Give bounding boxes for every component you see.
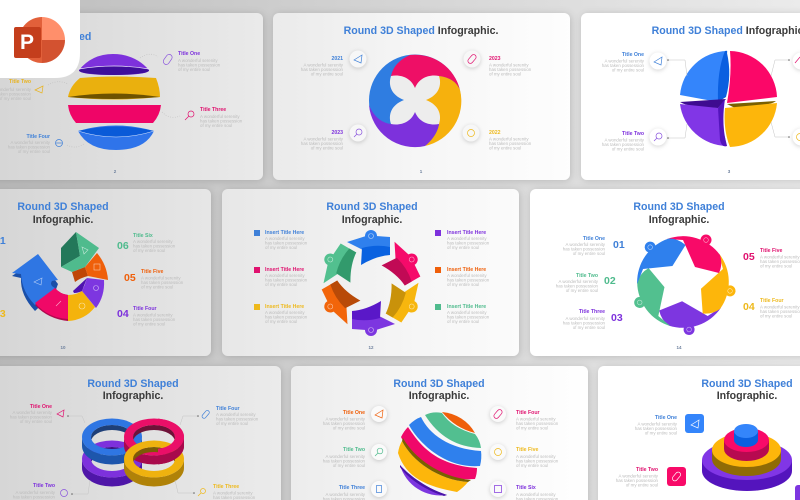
text: Title Six: 06 bbox=[117, 240, 129, 252]
text: 01 Title One: A wonderful serenity bbox=[565, 242, 606, 247]
icon: plane bbox=[650, 52, 666, 70]
text: Title Two: has taken possession bbox=[602, 142, 645, 147]
page number: 12 bbox=[368, 345, 374, 350]
text: 02 Title Two: A wonderful serenity bbox=[558, 279, 599, 284]
list item 6: of my entire soul bbox=[447, 319, 479, 324]
heading bbox=[701, 378, 793, 402]
text: Title Four: of my entire soul bbox=[133, 322, 165, 326]
text: 04 Title Four bbox=[743, 298, 800, 318]
chart: swirl circle bbox=[369, 54, 461, 147]
text: Title One: has taken possession bbox=[10, 414, 53, 420]
text: 02 Title Two: has taken possession bbox=[556, 284, 599, 288]
text: Title One: has taken possession bbox=[635, 426, 678, 431]
text: Title Four bbox=[8, 134, 51, 154]
list item 2: of my entire soul bbox=[265, 282, 297, 287]
icon: plane bbox=[57, 410, 64, 417]
text: Title Two: Title Two bbox=[622, 131, 644, 137]
icon: pink square bbox=[667, 467, 686, 486]
text: 05 Title Five: of my entire soul bbox=[760, 264, 792, 268]
panel: stacked discs slide bbox=[598, 366, 800, 500]
list item 2: Insert Title Here bbox=[265, 267, 304, 273]
text: 05 Title Five: 05 bbox=[743, 251, 755, 263]
icon: clip bbox=[792, 52, 800, 70]
list item 6: has taken possession bbox=[447, 314, 490, 320]
text: Title Four: has taken possession bbox=[8, 144, 51, 150]
icon: globe bbox=[60, 490, 68, 496]
chart: six segment ring bbox=[313, 230, 429, 336]
text: Title One: A wonderful serenity bbox=[604, 58, 645, 64]
text: Title Two bbox=[0, 79, 32, 101]
text: Title One: Title One bbox=[622, 52, 644, 58]
text: 2022: of my entire soul bbox=[489, 146, 521, 150]
text: 2022: A wonderful serenity bbox=[489, 136, 529, 142]
list item 1 bbox=[254, 230, 308, 250]
heading bbox=[17, 201, 109, 226]
text: Title One bbox=[635, 415, 678, 436]
heading: Infographic. bbox=[649, 214, 709, 226]
text: Title Five bbox=[516, 447, 559, 468]
text: Title Five: Title Five bbox=[516, 447, 539, 453]
list item 4: Insert Title Here bbox=[447, 230, 486, 236]
page number: 1 bbox=[420, 169, 423, 174]
icon: document bbox=[371, 481, 387, 497]
text: 2023 purple: A wonderful serenity bbox=[303, 136, 344, 142]
panel: star circle slide bbox=[530, 189, 800, 356]
text: Title Three: Title Three bbox=[200, 107, 226, 113]
connectors bbox=[48, 54, 180, 147]
list item 3 bbox=[254, 304, 308, 324]
text: 2021 bbox=[301, 56, 344, 76]
text: 2022 bbox=[489, 130, 532, 150]
text: Title One: A wonderful serenity bbox=[325, 416, 366, 422]
icon: plane bbox=[35, 86, 43, 93]
text: 01 Title One: 01 bbox=[613, 239, 625, 251]
icon: clip bbox=[162, 53, 173, 66]
text: Title Two: A wonderful serenity bbox=[618, 474, 659, 478]
text: Title Three bbox=[323, 485, 366, 500]
connectors bbox=[67, 415, 199, 495]
text: 03 Title Three: Title Three bbox=[579, 309, 605, 315]
panel: quartered sphere slide bbox=[581, 13, 800, 180]
list item 6 bbox=[435, 304, 490, 324]
text: Title Five: has taken possession bbox=[516, 458, 559, 464]
text: 2023 purple bbox=[301, 130, 344, 150]
heading bbox=[87, 378, 179, 402]
list item 4: A wonderful serenity bbox=[447, 236, 487, 241]
icon: coin bbox=[792, 128, 800, 146]
heading: Infographic. bbox=[717, 390, 777, 402]
heading: Round 3D Shaped Infographic. bbox=[344, 25, 498, 37]
list item 1: of my entire soul bbox=[265, 245, 297, 250]
heading: Infographic. bbox=[342, 214, 402, 226]
icon: clip bbox=[464, 50, 480, 68]
icon: coin bbox=[490, 444, 506, 460]
text: 01 Title One: Title One bbox=[583, 236, 605, 242]
text: 05 Title Five: Title Five bbox=[760, 248, 783, 254]
chart: spiral arrow bbox=[12, 232, 108, 321]
heading: Infographic. bbox=[33, 214, 93, 226]
icon: globe bbox=[56, 140, 62, 146]
list item 6: Insert Title Here bbox=[447, 304, 486, 310]
text: Title Four bbox=[117, 306, 176, 326]
text: 03 Title Three: of my entire soul bbox=[573, 325, 605, 330]
text: Title Four: has taken possession bbox=[216, 416, 259, 422]
icon: plane bbox=[371, 406, 387, 422]
text: Title Two: of my entire soul bbox=[333, 463, 365, 468]
list item 1: has taken possession bbox=[265, 240, 308, 246]
icon: calendar bbox=[490, 481, 506, 497]
heading: Round 3D Shaped bbox=[87, 378, 179, 390]
text: Title Four bbox=[516, 410, 559, 430]
text: 02 Title Two: 02 bbox=[604, 275, 616, 287]
text: Title Four: Title Four bbox=[26, 134, 50, 140]
text: Title Three bbox=[213, 484, 256, 500]
panel: spiral arrow slide bbox=[0, 189, 211, 356]
text: Title Five: Title Five bbox=[141, 269, 164, 275]
text: 03 Title Three: A wonderful serenity bbox=[565, 316, 606, 321]
text: Title Four: of my entire soul bbox=[216, 421, 248, 426]
list item 2 bbox=[254, 267, 308, 287]
text: Title One: of my entire soul bbox=[612, 68, 644, 72]
text: Title Three: Title Three bbox=[339, 485, 365, 491]
panel: linked rings slide bbox=[0, 366, 281, 500]
text: Title Five: has taken possession bbox=[141, 280, 184, 285]
text: Title One: of my entire soul bbox=[333, 426, 365, 430]
panel: butterfly circle slide bbox=[273, 13, 570, 180]
text: Title Six: has taken possession bbox=[133, 244, 176, 248]
text: Title Two: Title Two bbox=[9, 79, 31, 85]
text: 04 Title Four: of my entire soul bbox=[760, 314, 792, 318]
list item 5: of my entire soul bbox=[447, 282, 479, 287]
text: Title One: has taken possession bbox=[178, 62, 221, 68]
list item 2: A wonderful serenity bbox=[265, 273, 305, 278]
list item 4: of my entire soul bbox=[447, 245, 479, 250]
heading: Infographic. bbox=[409, 390, 469, 402]
icon: clip bbox=[490, 406, 506, 422]
icon: plane bbox=[350, 50, 366, 68]
list item 3: has taken possession bbox=[265, 314, 308, 320]
icon: key bbox=[650, 128, 666, 146]
chart: star ring bbox=[624, 231, 740, 343]
text: 2021: 2021 bbox=[331, 56, 343, 62]
heading: Round 3D Shaped bbox=[633, 201, 725, 213]
text: Title Three: Title Three bbox=[213, 484, 239, 490]
text: 02 Title Two bbox=[556, 273, 616, 293]
text: Title Two: has taken possession bbox=[323, 458, 366, 464]
text: Title Two: of my entire soul bbox=[612, 146, 644, 152]
icon: key bbox=[198, 488, 206, 496]
list item 2: has taken possession bbox=[265, 278, 308, 282]
text: 03 Title Three: 03 bbox=[611, 312, 623, 324]
text: Title Six: Title Six bbox=[516, 485, 536, 491]
heading: Round 3D Shaped bbox=[17, 201, 109, 213]
text: 01 Title One: has taken possession bbox=[563, 246, 606, 252]
text: Title Four: A wonderful serenity bbox=[10, 140, 51, 145]
text: Title Two bbox=[13, 483, 56, 500]
text: 2023 pink: of my entire soul bbox=[489, 72, 521, 76]
text: Title Six: A wonderful serenity bbox=[516, 492, 556, 497]
text: Title One: of my entire soul bbox=[178, 67, 210, 72]
text: Title Four: has taken possession bbox=[516, 421, 559, 426]
text: Title Four bbox=[216, 406, 259, 426]
page number: 14 bbox=[676, 345, 682, 350]
text: 2023 purple: has taken possession bbox=[301, 141, 344, 146]
chart: stacked discs bbox=[702, 424, 792, 491]
list item 1: A wonderful serenity bbox=[265, 236, 305, 241]
text: 2023 pink bbox=[489, 56, 532, 76]
text: Title Four: A wonderful serenity bbox=[516, 416, 556, 422]
text: Title Three: has taken possession bbox=[213, 495, 256, 500]
text: 2022: 2022 bbox=[489, 130, 501, 136]
text: 2021: of my entire soul bbox=[311, 72, 343, 76]
text: Title One: A wonderful serenity bbox=[637, 422, 678, 426]
panel: logo badge bbox=[0, 0, 80, 78]
text: Title Four: Title Four bbox=[516, 410, 540, 416]
page number: 10 bbox=[60, 345, 66, 350]
text: 2023 pink: has taken possession bbox=[489, 67, 532, 72]
text: Title Five bbox=[124, 269, 184, 290]
heading: Round 3D Shaped bbox=[701, 378, 793, 390]
text: Title Five: 05 bbox=[124, 272, 136, 284]
text: Title One bbox=[602, 52, 645, 72]
text: Title One bbox=[178, 51, 221, 72]
text: Title Four: A wonderful serenity bbox=[133, 312, 173, 318]
heading: Round 3D Shaped bbox=[393, 378, 485, 390]
list item 5: has taken possession bbox=[447, 278, 490, 282]
chart: striped ball bbox=[398, 412, 481, 496]
heading bbox=[326, 201, 418, 226]
list item 3: of my entire soul bbox=[265, 319, 297, 324]
page number: 3 bbox=[728, 169, 731, 174]
text: Title Five: A wonderful serenity bbox=[516, 454, 556, 459]
text: Title Two: Title Two bbox=[343, 447, 365, 453]
panel: striped ball slide bbox=[291, 366, 588, 500]
heading bbox=[633, 201, 725, 226]
page number: 2 bbox=[114, 169, 117, 174]
text: 2021: A wonderful serenity bbox=[303, 62, 344, 68]
text: Title Three: A wonderful serenity bbox=[213, 490, 253, 496]
chart: sliced sphere bbox=[68, 54, 161, 150]
text: Title Two bbox=[616, 467, 659, 488]
text: 03 Title Three: has taken possession bbox=[563, 320, 606, 326]
text: Title Four: of my entire soul bbox=[18, 149, 50, 154]
icon: purple square bbox=[795, 485, 800, 500]
text: Title Three: A wonderful serenity bbox=[325, 492, 366, 497]
text: 05 Title Five bbox=[743, 248, 800, 268]
text: Title Four: A wonderful serenity bbox=[216, 412, 256, 417]
text: Title One: has taken possession bbox=[602, 63, 645, 68]
text: Title Two bbox=[323, 447, 366, 468]
list item 3: A wonderful serenity bbox=[265, 310, 305, 315]
icon: key bbox=[371, 444, 387, 460]
text: 04 Title Four: 04 bbox=[743, 301, 755, 313]
text: 02 Title Two: of my entire soul bbox=[566, 288, 598, 293]
list item 6: A wonderful serenity bbox=[447, 310, 487, 315]
text: Title Six bbox=[516, 485, 559, 500]
text: Title Three bbox=[200, 107, 243, 128]
text: Title Two bbox=[602, 131, 645, 152]
text: 2023 pink: 2023 bbox=[489, 56, 501, 62]
heading: Round 3D Shaped bbox=[326, 201, 418, 213]
text: Title One: A wonderful serenity bbox=[12, 410, 53, 415]
chart: quartered sphere bbox=[680, 51, 777, 147]
text: Title Two: Title Two bbox=[33, 483, 55, 489]
text: Title One: of my entire soul bbox=[20, 419, 52, 424]
list item 4: has taken possession bbox=[447, 240, 490, 246]
text: Title One: has taken possession bbox=[323, 421, 366, 426]
chart: linked rings bbox=[82, 418, 184, 486]
text: Title Four: Title Four bbox=[216, 406, 240, 412]
heading: Infographic. bbox=[103, 390, 163, 402]
text: Title One: Title One bbox=[343, 410, 365, 416]
text: Title One bbox=[323, 410, 366, 430]
text: 01 Title One bbox=[563, 236, 625, 256]
text: 2023 purple: of my entire soul bbox=[311, 146, 343, 150]
icon: PowerPoint logo: P bbox=[20, 31, 34, 54]
list item 4 bbox=[435, 230, 490, 250]
text: Title Four: Title Four bbox=[133, 306, 157, 312]
text: 04 Title Four: A wonderful serenity bbox=[760, 304, 800, 310]
icon: coin bbox=[462, 124, 480, 142]
list item 5: A wonderful serenity bbox=[447, 273, 487, 278]
icon: clip bbox=[201, 410, 210, 419]
text: Title One bbox=[10, 404, 53, 424]
text: 2021: has taken possession bbox=[301, 67, 344, 72]
text: Title Five: of my entire soul bbox=[516, 463, 548, 468]
text: 02 Title Two: Title Two bbox=[576, 273, 598, 279]
text: Title Four: 04 bbox=[117, 308, 129, 320]
text: Title Five: of my entire soul bbox=[141, 284, 173, 290]
text: Title Five: A wonderful serenity bbox=[141, 276, 181, 280]
list item 5 bbox=[435, 267, 490, 287]
text: Title Six bbox=[117, 233, 176, 253]
panel: hexagon ring slide bbox=[222, 189, 519, 356]
text: 2023 pink: A wonderful serenity bbox=[489, 62, 529, 68]
text: Title One: A wonderful serenity bbox=[178, 58, 218, 63]
text: Title One: Title One bbox=[655, 415, 677, 421]
text: Title Three: of my entire soul bbox=[200, 123, 232, 128]
text: Title Four: has taken possession bbox=[133, 317, 176, 322]
text: Title Two: A wonderful serenity bbox=[325, 454, 366, 459]
text: Title Two: Title Two bbox=[636, 467, 658, 473]
list item 1: Insert Title Here bbox=[265, 230, 304, 236]
text: Title Six: Title Six bbox=[133, 233, 153, 239]
icon: blue square bbox=[685, 414, 704, 433]
text: Title One: Title One bbox=[178, 51, 200, 57]
icon: key bbox=[185, 111, 194, 120]
text: 2022: has taken possession bbox=[489, 141, 532, 146]
text: Title Two: of my entire soul bbox=[626, 482, 658, 488]
panel: sliced sphere slide bbox=[0, 13, 263, 180]
text: 04 Title Four: Title Four bbox=[760, 298, 784, 304]
text: Title Three: has taken possession bbox=[200, 118, 243, 124]
connectors bbox=[667, 59, 790, 139]
icon: key bbox=[350, 124, 366, 142]
text: 2023 purple: 2023 bbox=[331, 130, 343, 136]
text: Title Six: A wonderful serenity bbox=[133, 239, 173, 244]
heading bbox=[393, 378, 485, 402]
list item 3: Insert Title Here bbox=[265, 304, 304, 310]
text: 05 Title Five: A wonderful serenity bbox=[760, 254, 800, 260]
text: Title Two: A wonderful serenity bbox=[15, 490, 56, 495]
text: 01 Title One: of my entire soul bbox=[573, 251, 605, 256]
text: Title Six: of my entire soul bbox=[133, 248, 165, 253]
heading fragment: ed bbox=[79, 31, 91, 43]
text: Title One: Title One bbox=[30, 404, 52, 410]
text: Title One: of my entire soul bbox=[645, 430, 677, 436]
text: Title Two: has taken possession bbox=[616, 478, 659, 483]
text: Title Four: of my entire soul bbox=[516, 426, 548, 430]
text: 03 Title Three bbox=[563, 309, 623, 330]
text: Title Two: A wonderful serenity bbox=[604, 138, 645, 142]
text: Title Three: A wonderful serenity bbox=[200, 114, 240, 119]
list item 5: Insert Title Here bbox=[447, 267, 486, 273]
text: Title Two: has taken possession bbox=[13, 494, 56, 500]
